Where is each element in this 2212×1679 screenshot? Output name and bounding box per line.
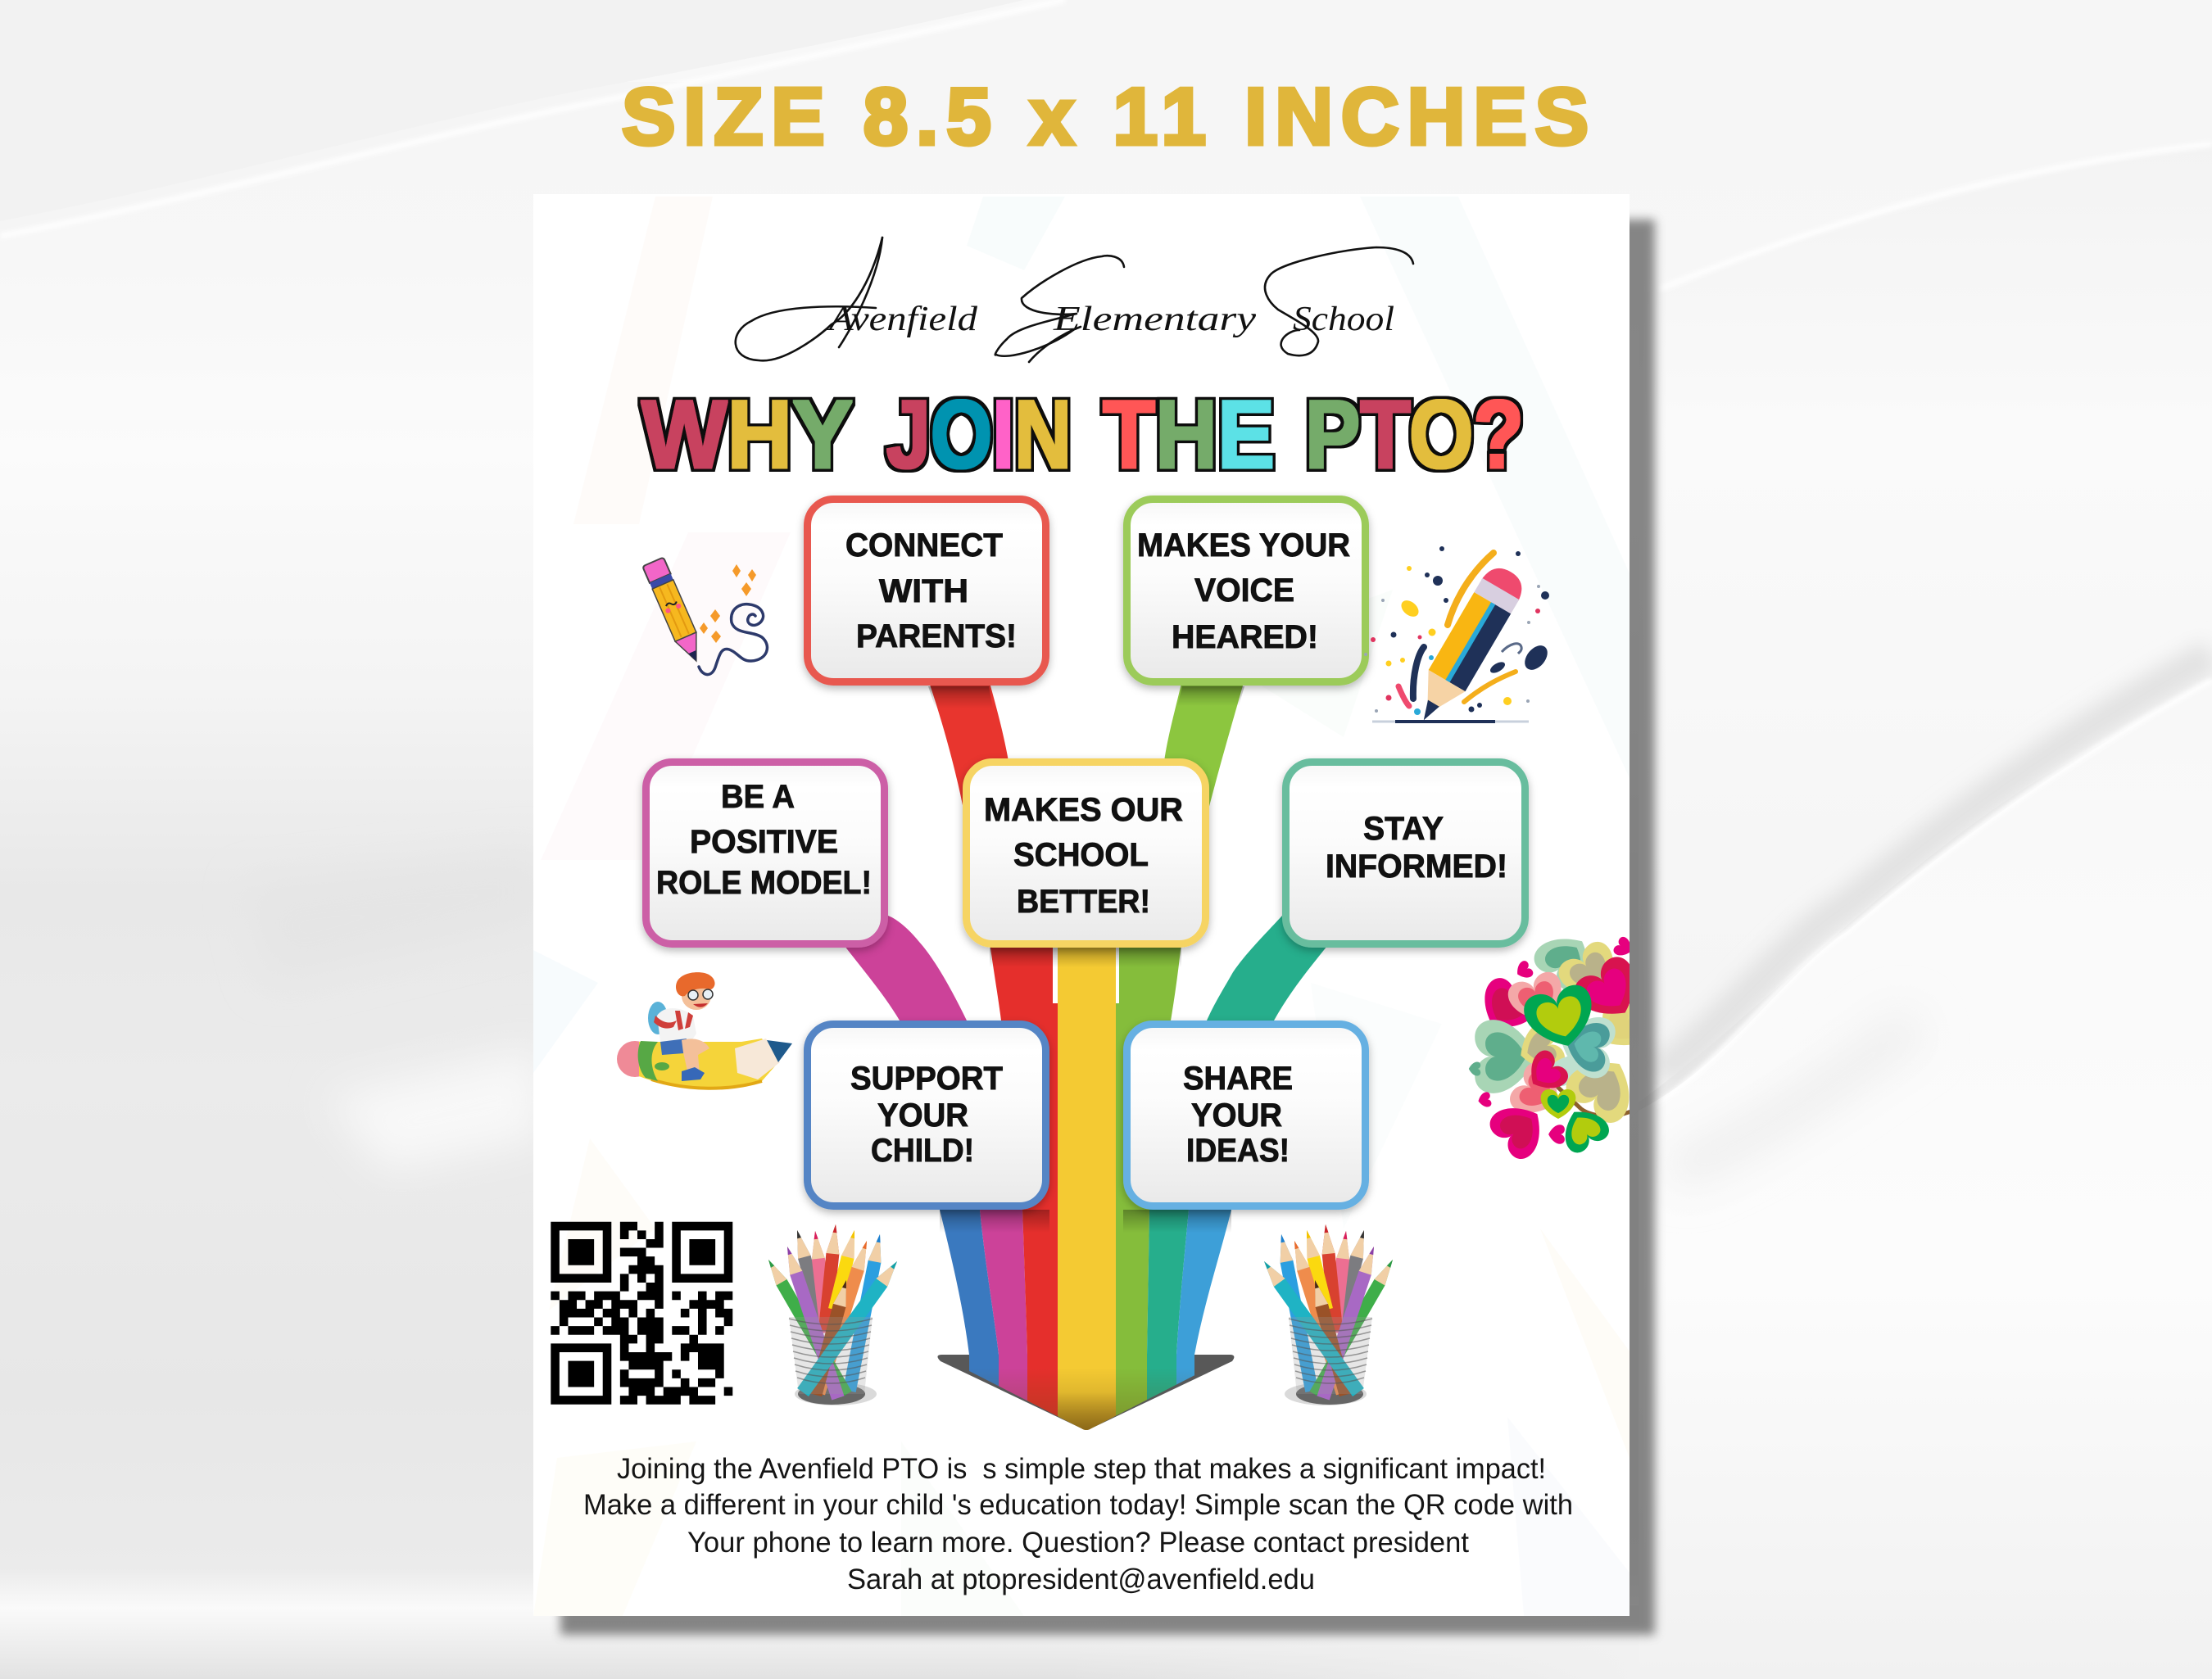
box: support your child: CHILD!	[871, 1133, 974, 1169]
poster drop shadow	[560, 219, 1655, 1635]
box: makes our school better	[967, 762, 1206, 944]
box: support your child: YOUR	[877, 1097, 968, 1134]
main title: WHY	[641, 381, 853, 489]
main title: JOIN	[886, 381, 1072, 489]
box: be a positive role model: ROLE MODEL!	[656, 865, 872, 901]
box: makes your voice heard: VOICE	[1194, 572, 1294, 609]
closing message: Make a different in your child 's education today! Simple scan the QR code with	[583, 1489, 1573, 1521]
icon: boy riding pencil	[617, 972, 792, 1088]
box: makes our school better: MAKES OUR	[984, 792, 1183, 828]
school name script: School	[1293, 301, 1394, 338]
ribbon: red top	[928, 680, 1009, 827]
arrow head wings	[937, 1355, 1234, 1430]
icon: left pencil cup	[764, 1224, 903, 1405]
box: connect with parents: WITH	[879, 573, 968, 609]
box: share your ideas: YOUR	[1191, 1097, 1282, 1134]
QR code	[551, 1222, 732, 1405]
box: share your ideas: SHARE	[1183, 1061, 1293, 1097]
ribbon: yellow trunk	[1058, 942, 1116, 1450]
box: makes our school better: BETTER!	[1017, 884, 1150, 920]
school name script: Avenfield	[827, 301, 978, 338]
box: stay informed	[1286, 762, 1525, 944]
icon: right pencil cup	[1258, 1224, 1398, 1405]
icon: heart tree	[1468, 937, 1630, 1159]
ribbon: red trunk	[990, 942, 1058, 1441]
panel: flyer page	[533, 194, 1630, 1616]
box: makes your voice heard: HEARED!	[1172, 619, 1318, 655]
box: be a positive role model: BE A	[721, 779, 795, 815]
ribbon: left blue	[940, 1210, 999, 1386]
main title: PTO?	[1305, 381, 1524, 489]
school name script: Elementary	[1053, 301, 1256, 338]
ribbon: right blue	[1176, 1210, 1231, 1384]
ribbon: magenta	[845, 916, 1027, 1441]
main title: THE	[1103, 381, 1275, 489]
box: makes your voice heard: MAKES YOUR	[1137, 527, 1350, 563]
ribbon: teal	[1147, 916, 1327, 1441]
closing message: Joining the Avenfield PTO is s simple step that makes a significant impact!	[617, 1453, 1546, 1485]
box: makes your voice heard	[1127, 500, 1365, 681]
box: stay informed: STAY	[1363, 811, 1444, 847]
ribbon: green top	[1164, 680, 1244, 819]
box: share your ideas	[1127, 1024, 1365, 1206]
box: makes our school better: SCHOOL	[1013, 837, 1149, 873]
closing message	[583, 1453, 1573, 1595]
closing message: Your phone to learn more. Question? Please contact president	[687, 1527, 1469, 1559]
rainbow arrow of ribbons	[845, 680, 1327, 1450]
box: be a positive role model: POSITIVE	[690, 824, 838, 860]
box: connect with parents: CONNECT	[845, 527, 1003, 563]
size heading: SIZE 8.5 x 11 INCHES	[622, 71, 1589, 161]
ribbon: green trunk	[1116, 942, 1181, 1441]
closing message: Sarah at ptopresident@avenfield.edu	[847, 1564, 1315, 1595]
box: support your child: SUPPORT	[850, 1061, 1003, 1097]
box: connect with parents	[808, 500, 1045, 681]
box: support your child	[808, 1024, 1045, 1206]
box: share your ideas: IDEAS!	[1186, 1133, 1290, 1169]
box: be a positive role model	[646, 762, 885, 944]
icon: pencil with paint splatter	[1364, 546, 1552, 731]
box: connect with parents: PARENTS!	[856, 618, 1017, 654]
box: stay informed: INFORMED!	[1326, 849, 1507, 885]
icon: cute pencil with squiggle	[642, 557, 767, 675]
school name script	[736, 238, 1413, 362]
main title	[641, 381, 1524, 489]
